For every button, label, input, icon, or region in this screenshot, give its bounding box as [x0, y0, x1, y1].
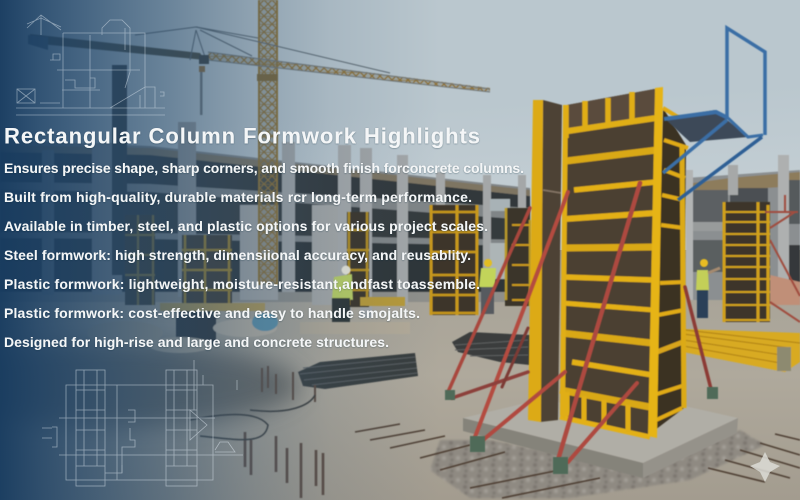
highlight 5: Plastic formwork: lightweight, moisture-resistant,andfast toassemble.: [4, 276, 480, 292]
workers: [332, 259, 720, 330]
return side panel: [652, 108, 688, 430]
blueprint sketch bottom: [42, 360, 243, 486]
background: ground: [0, 250, 800, 500]
blue gradient overlay: [0, 0, 440, 500]
ground rebar mats: [355, 424, 800, 498]
side panel: [528, 100, 562, 422]
title: Rectangular Column Formwork Highlights: [4, 124, 480, 148]
formwork right: [723, 202, 770, 322]
blue access platform: [663, 28, 765, 200]
site materials: [87, 297, 800, 498]
sandbags: [87, 297, 410, 353]
tower crane: [28, 0, 490, 285]
sparkle icon: [750, 452, 780, 482]
highlight 6: Plastic formwork: cost-effective and easy to handle smojalts.: [4, 305, 420, 321]
highlight 1: Ensures precise shape, sharp corners, and smooth finish forconcrete columns.: [4, 160, 524, 176]
prop base plates: [445, 387, 718, 474]
rebar pile centre: [298, 353, 418, 389]
red support props: [448, 183, 712, 462]
concrete slab: [463, 402, 738, 478]
yellow beams: [683, 329, 800, 372]
background: sky: [0, 0, 800, 260]
rebar mesh: [452, 332, 530, 365]
main column formwork: [528, 87, 688, 438]
highlight 7: Designed for high-rise and large and concrete structures.: [4, 334, 389, 350]
gravel around slab: [430, 430, 765, 498]
front panel: [560, 87, 663, 438]
blueprint sketch top: [16, 15, 165, 115]
formwork behind worker: [505, 208, 530, 306]
highlight 4: Steel formwork: high strength, dimensiional accuracy, and reusablity.: [4, 247, 471, 263]
distant formwork columns: [125, 195, 800, 322]
ground shadow area: [0, 343, 300, 427]
formwork left group: [125, 212, 369, 310]
worker left: [332, 266, 353, 330]
formwork centre: [430, 205, 478, 315]
hose cables: [190, 395, 315, 440]
highlight 3: Available in timber, steel, and plastic options for various project scales.: [4, 218, 488, 234]
worker centre: [479, 259, 496, 314]
dark crate: [176, 308, 216, 346]
background building right: [686, 155, 800, 305]
highlights text list: [4, 160, 524, 350]
highlight 2: Built from high-quality, durable materials rcr long-term performance.: [4, 189, 472, 205]
background building left: [0, 122, 532, 318]
rebar stakes: [245, 366, 323, 498]
worker right: [696, 259, 720, 318]
